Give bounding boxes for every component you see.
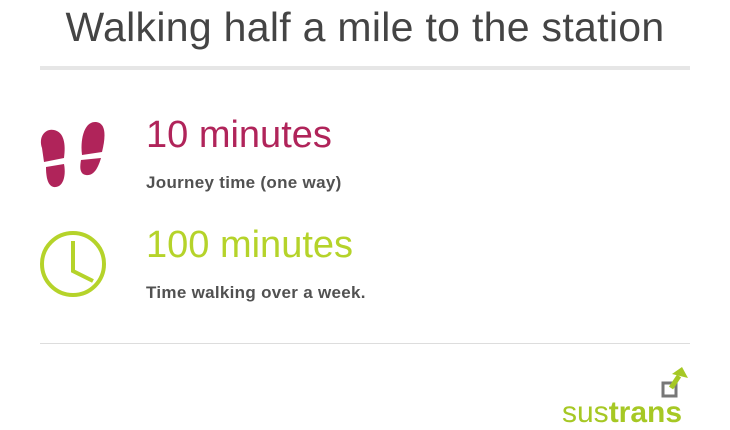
logo: sustrans (562, 367, 688, 429)
stat: journey time (146, 114, 342, 192)
stat: weekly walking (146, 224, 366, 302)
stat: journey time: 10 minutes (146, 114, 332, 156)
stat: journey time: Journey time (one way) (146, 173, 342, 192)
stat: weekly walking: Time walking over a week. (146, 283, 366, 302)
icon: footprints (40, 122, 104, 188)
stat: weekly walking: 100 minutes (146, 224, 353, 266)
title: Walking half a mile to the station (66, 4, 664, 50)
text: sustrans (562, 396, 682, 429)
icon: clock (40, 231, 106, 297)
